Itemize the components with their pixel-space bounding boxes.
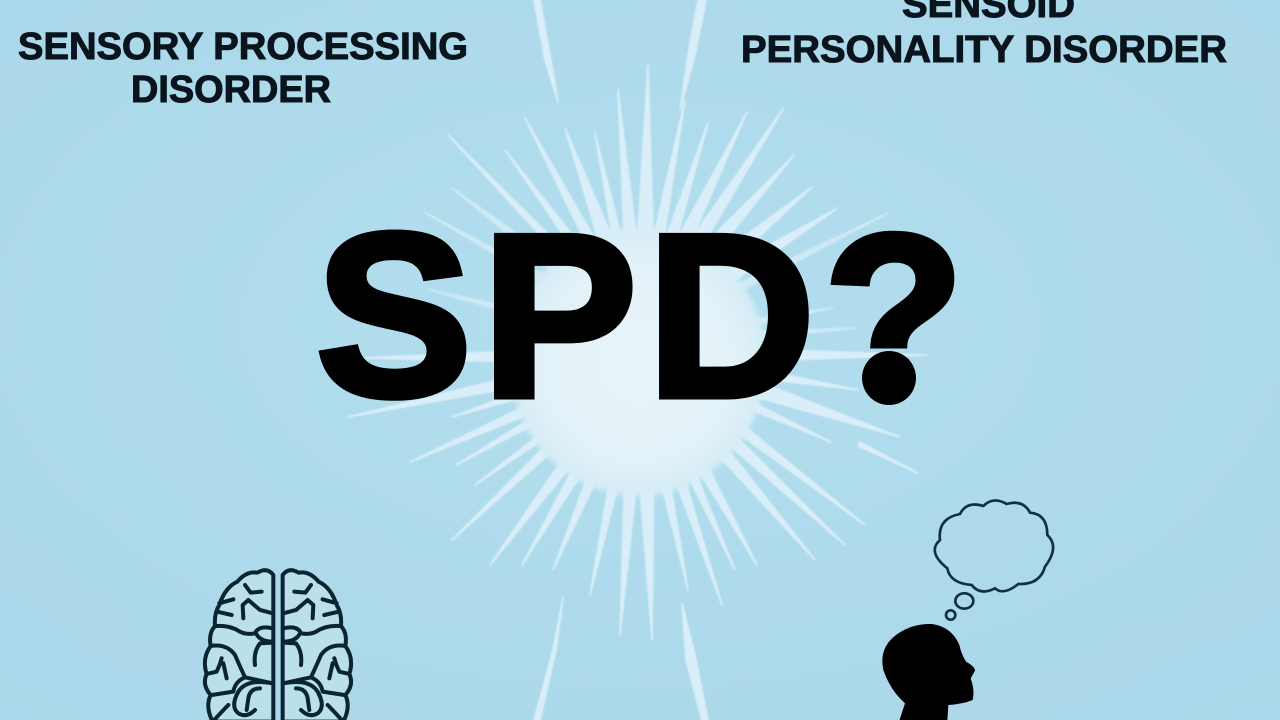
main title: ? xyxy=(824,187,964,440)
main title: D xyxy=(647,187,815,446)
right heading: PERSONALITY DISORDER xyxy=(741,29,1227,71)
left heading: DISORDER xyxy=(131,69,331,111)
right heading xyxy=(741,0,1227,71)
thought cloud xyxy=(935,500,1053,591)
brain right hemisphere xyxy=(283,570,351,720)
brain left hemisphere xyxy=(205,570,273,720)
main title: P xyxy=(482,187,637,446)
side and lower rays xyxy=(348,335,927,640)
main title: S xyxy=(316,186,472,445)
upper rays xyxy=(448,65,838,340)
icon: head with thought bubble xyxy=(882,500,1053,720)
question mark round dot xyxy=(862,351,916,405)
detached rays xyxy=(534,0,708,720)
head silhouette xyxy=(882,624,975,720)
starburst xyxy=(348,0,927,720)
icon: brain xyxy=(205,570,351,720)
left heading: SENSORY PROCESSING xyxy=(18,26,468,68)
central glow disc xyxy=(510,228,766,496)
thought bubble large xyxy=(955,593,973,609)
left heading xyxy=(18,26,468,111)
faint side rays xyxy=(424,188,888,350)
thought bubble small xyxy=(946,610,955,620)
main title xyxy=(316,186,964,446)
